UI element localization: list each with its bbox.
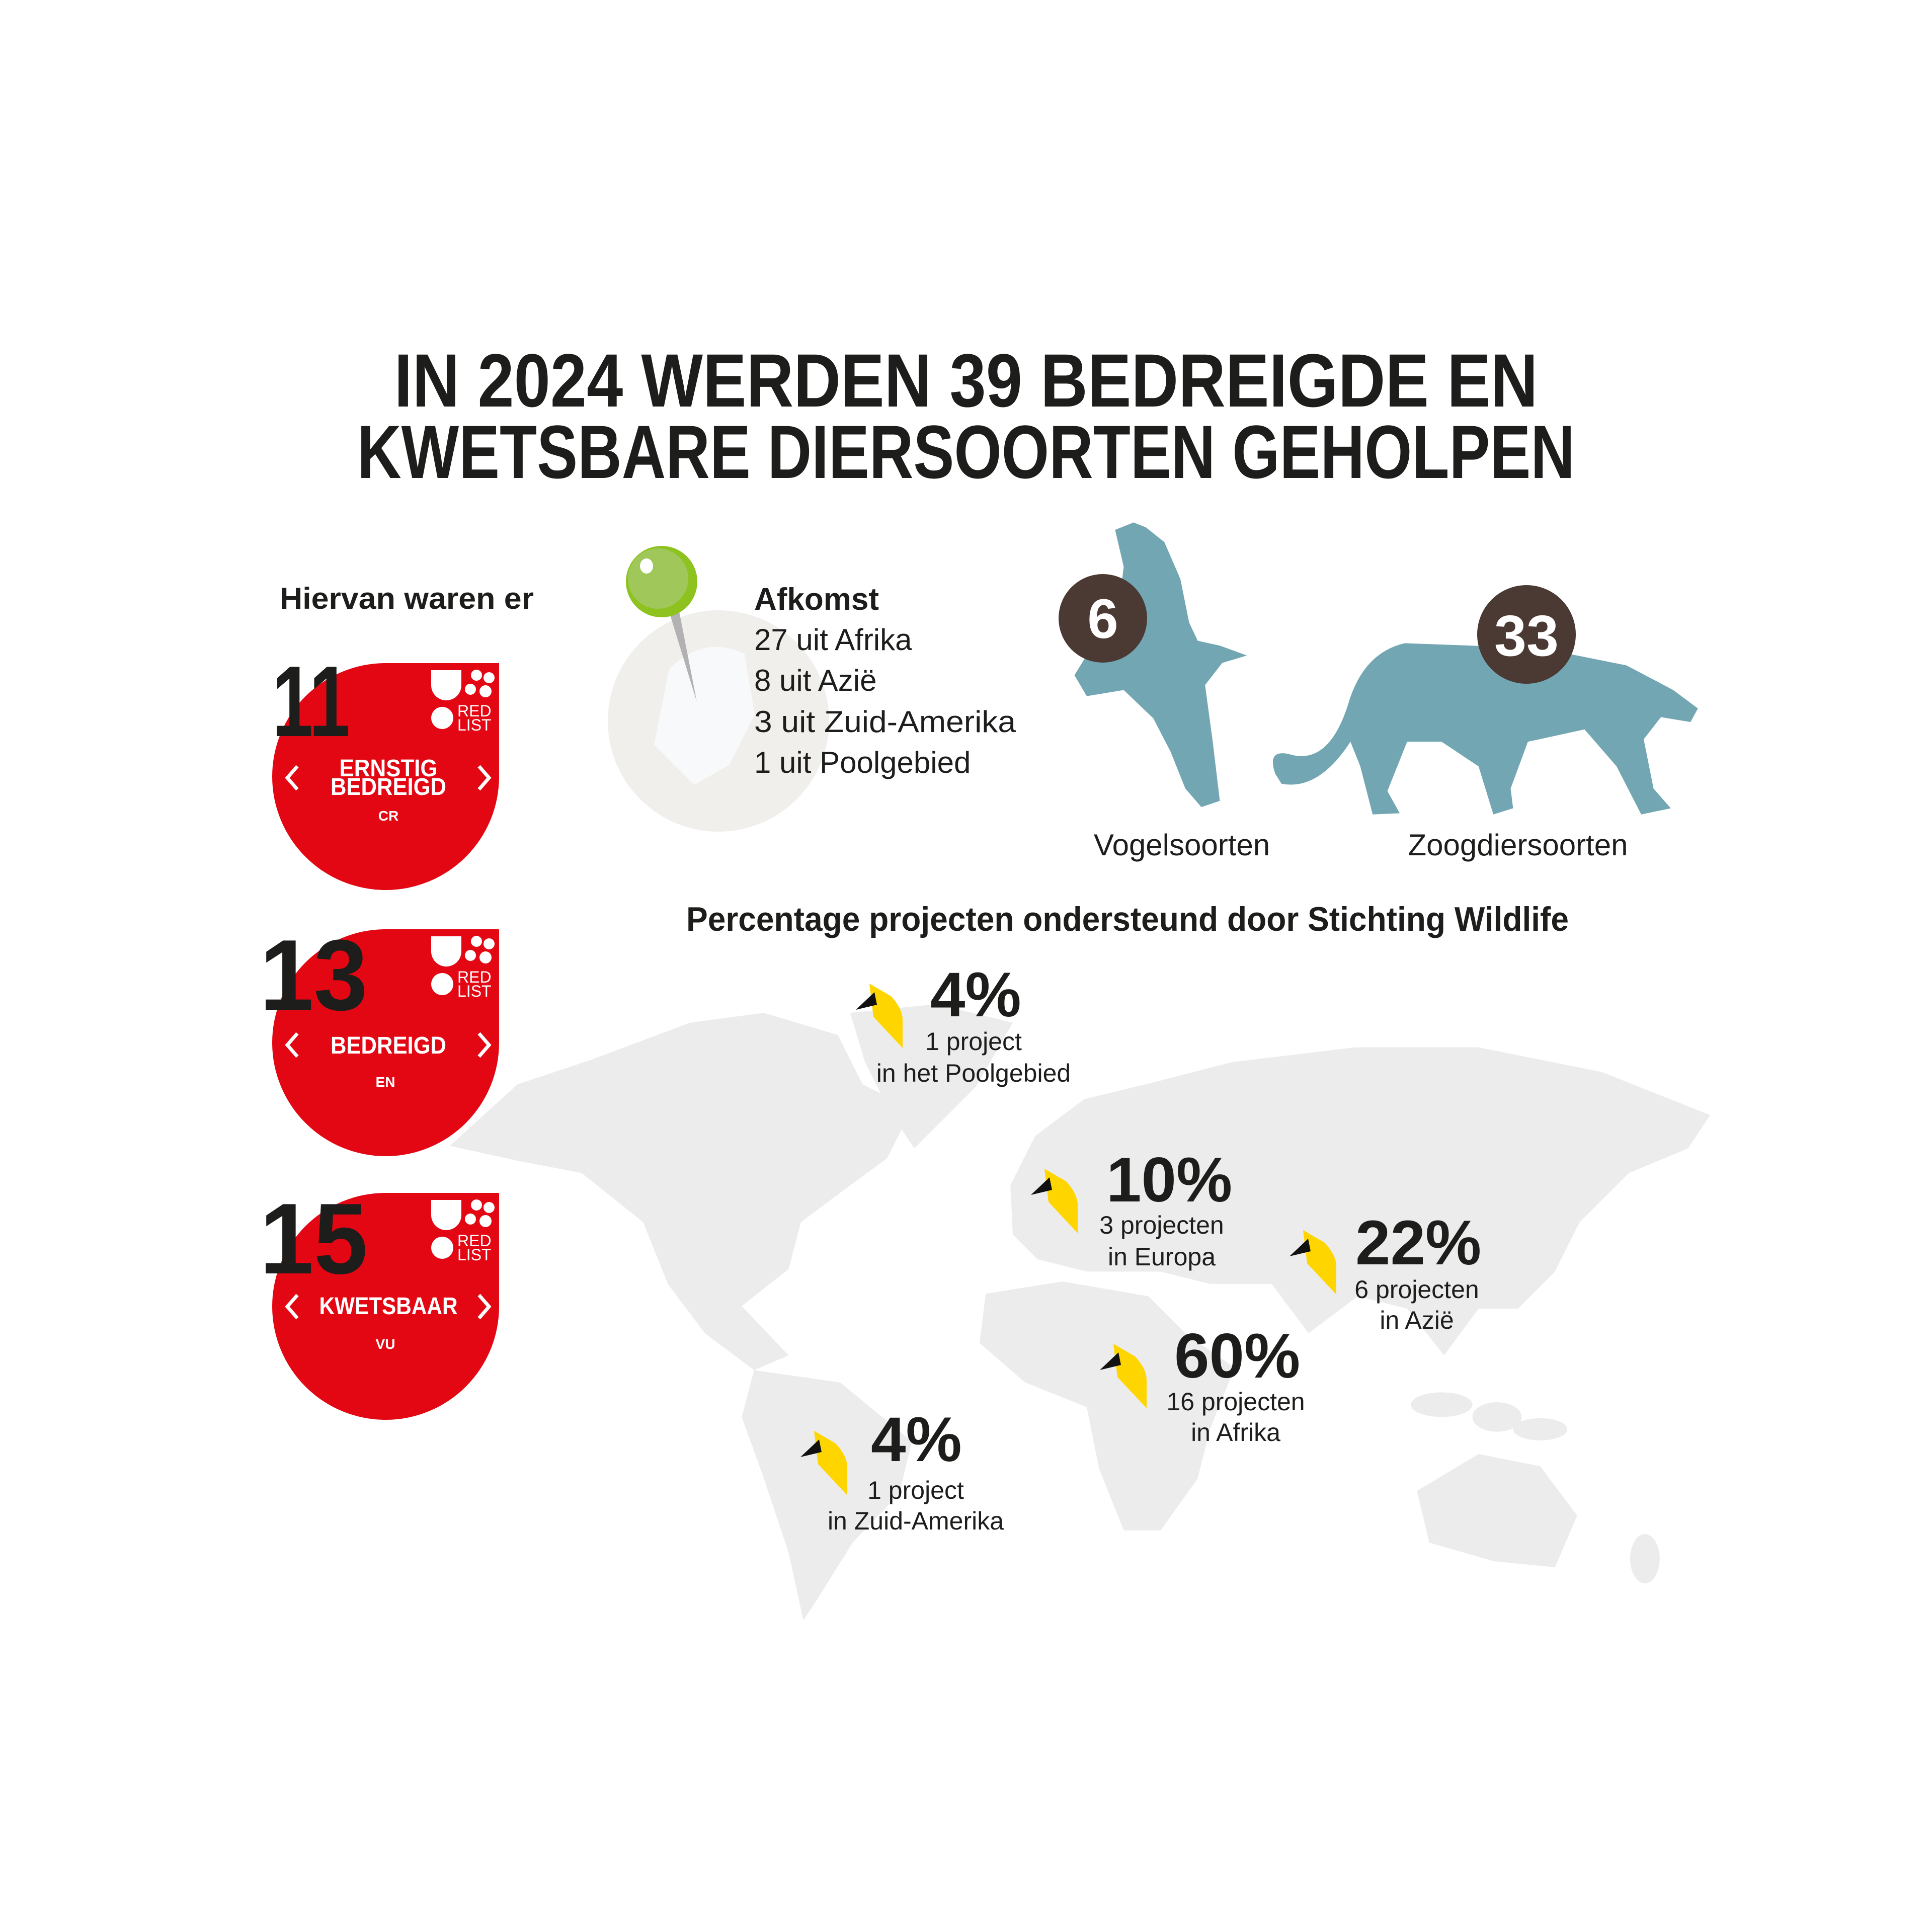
marker: azie [1290, 1208, 1481, 1334]
badge: ernstig bedreigd: CR [378, 808, 398, 824]
marker: poolgebied [856, 960, 1071, 1087]
world map [450, 1004, 1710, 1620]
icon: big cat with count [1273, 585, 1698, 815]
badge: kwetsbaar: VU [376, 1336, 395, 1352]
marker: afrika: in Afrika [1191, 1418, 1280, 1446]
text: afkomst: 8 uit Azië [754, 664, 876, 697]
title: KWETSBARE DIERSOORTEN GEHOLPEN [357, 410, 1575, 494]
text: afkomst: 27 uit Afrika [754, 623, 912, 657]
marker: poolgebied: in het Poolgebied [876, 1059, 1071, 1087]
icon: bird with count: 6 [1087, 588, 1118, 650]
marker: europa: 3 projecten [1099, 1211, 1224, 1239]
icon: big cat with count: 33 [1494, 604, 1559, 668]
marker: afrika: 60% [1174, 1321, 1300, 1391]
marker: europa: in Europa [1108, 1243, 1216, 1271]
marker: afrika [1100, 1321, 1305, 1446]
marker: poolgebied: 4% [930, 960, 1021, 1030]
badge: ernstig bedreigd [272, 646, 499, 890]
marker: azie: in Azië [1380, 1306, 1454, 1334]
badge: ernstig bedreigd: 11 [272, 646, 350, 758]
marker: zuid-amerika: in Zuid-Amerika [828, 1507, 1004, 1535]
badge: bedreigd: 13 [260, 919, 368, 1031]
marker: zuid-amerika: 1 project [867, 1476, 964, 1504]
text: afkomst: 1 uit Poolgebied [754, 746, 971, 779]
globe with pin [608, 546, 829, 832]
badge: bedreigd: EN [376, 1074, 395, 1090]
text: afkomst: 3 uit Zuid-Amerika [754, 705, 1016, 739]
marker: poolgebied: 1 project [925, 1027, 1022, 1056]
badge: ernstig bedreigd: ERNSTIG [339, 755, 438, 782]
marker: zuid-amerika: 4% [871, 1405, 962, 1475]
badge: bedreigd [260, 919, 499, 1156]
label: zoogdiersoorten: Zoogdiersoorten [1408, 828, 1628, 862]
badge: kwetsbaar: KWETSBAAR [319, 1293, 458, 1320]
text: afkomst [754, 582, 1016, 779]
marker: europa: 10% [1106, 1145, 1232, 1215]
marker: afrika: 16 projecten [1166, 1388, 1305, 1416]
title [357, 338, 1575, 494]
badge: ernstig bedreigd: BEDREIGD [331, 774, 446, 800]
heading: Hiervan waren er: Hiervan waren er [280, 582, 534, 615]
badge: kwetsbaar: 15 [260, 1183, 368, 1295]
marker: azie: 22% [1355, 1208, 1481, 1278]
badge: bedreigd: BEDREIGD [331, 1032, 446, 1059]
text: afkomst: Afkomst [754, 582, 879, 617]
title: IN 2024 WERDEN 39 BEDREIGDE EN [394, 338, 1538, 423]
subtitle: Percentage projecten ondersteund door Stichting Wildlife [686, 900, 1569, 938]
marker: zuid-amerika [800, 1405, 1004, 1535]
label: vogelsoorten: Vogelsoorten [1094, 828, 1270, 862]
marker: azie: 6 projecten [1354, 1275, 1479, 1304]
icon: bird with count [1059, 522, 1247, 807]
badge: kwetsbaar [260, 1183, 499, 1420]
marker: europa [1031, 1145, 1232, 1271]
